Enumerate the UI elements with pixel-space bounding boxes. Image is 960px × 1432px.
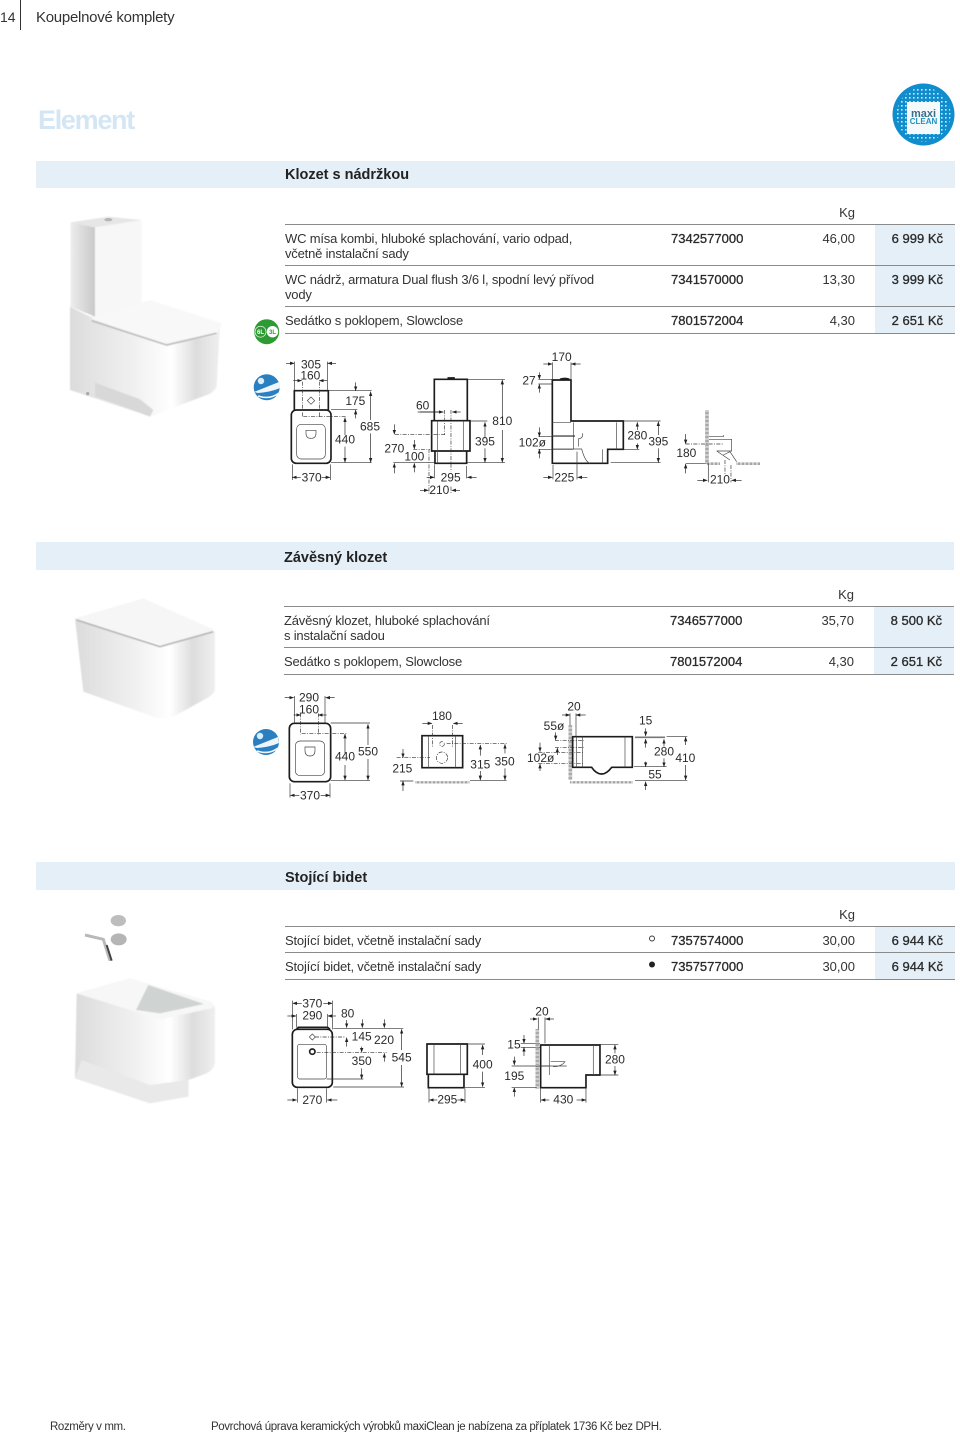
section heading band: Stojící bidet bbox=[285, 870, 367, 886]
product table: WC nádrž, armatura Dual flush 3/6 l, spodní levý přívod bbox=[285, 272, 594, 287]
technical drawing: bidet views: 80 bbox=[341, 1007, 355, 1021]
product table: Sedátko s poklopem, Slowclose bbox=[284, 654, 462, 669]
technical drawing: side view and installation: 395 bbox=[648, 435, 669, 449]
product table: 7346577000 bbox=[670, 613, 742, 628]
technical drawing: side view and installation: 280 bbox=[627, 428, 648, 442]
product table: 7801572004 bbox=[671, 313, 743, 328]
technical drawing: top view and front view bbox=[286, 357, 513, 497]
product table: 30,00 bbox=[822, 959, 855, 974]
icon: 6L/3L dual flush bbox=[254, 319, 279, 344]
page header: page number and chapter: Koupelnové komplety bbox=[36, 9, 175, 26]
technical drawing: bidet views bbox=[287, 996, 625, 1107]
technical drawing: top view and cistern view: 370 bbox=[300, 788, 320, 802]
title: Element: Element bbox=[38, 105, 135, 135]
technical drawing: bidet views: 220 bbox=[374, 1033, 394, 1047]
product table: Stojící bidet, včetně instalační sady bbox=[285, 933, 482, 948]
technical drawing: side view: 55 bbox=[648, 768, 662, 782]
technical drawing: side view: 55ø bbox=[544, 719, 565, 733]
section heading band bbox=[36, 862, 955, 890]
technical drawing: top view and cistern view bbox=[285, 691, 515, 802]
product table: 2 651 Kč bbox=[892, 313, 943, 328]
icon: maxiClean badge bbox=[892, 84, 954, 146]
icon: 6L/3L dual flush: 6L bbox=[257, 330, 264, 336]
product table: 7357574000 bbox=[671, 933, 743, 948]
technical drawing: bidet views: 370 bbox=[302, 996, 323, 1010]
product table: WC mísa kombi, hluboké splachování, vario odpad, bbox=[285, 231, 572, 246]
technical drawing: side view bbox=[527, 699, 696, 790]
product table: Závěsný klozet, hluboké splachování bbox=[284, 613, 490, 628]
technical drawing: side view and installation: 180 bbox=[676, 446, 697, 460]
product table: 7357577000 bbox=[671, 959, 743, 974]
icon: 6L/3L dual flush: 3L bbox=[269, 330, 276, 336]
section heading band bbox=[36, 161, 955, 188]
product table: včetně instalační sady bbox=[285, 246, 409, 261]
technical drawing: bidet views: 350 bbox=[352, 1054, 372, 1068]
panel: Klozet s nádržkou bbox=[36, 161, 955, 497]
product table: 3 999 Kč bbox=[892, 272, 943, 287]
product table: 7342577000 bbox=[671, 231, 743, 246]
technical drawing: side view and installation: 27 bbox=[522, 374, 536, 388]
product table: 13,30 bbox=[822, 272, 855, 287]
photo: close-coupled toilet bbox=[70, 217, 222, 417]
product table bbox=[285, 205, 955, 334]
product table: 30,00 bbox=[822, 933, 855, 948]
technical drawing: side view and installation: 225 bbox=[554, 470, 575, 484]
technical drawing: top view and cistern view: 315 bbox=[470, 757, 491, 771]
product table: 8 500 Kč bbox=[891, 613, 942, 628]
technical drawing: side view and installation: 210 bbox=[710, 473, 730, 487]
product table: 7341570000 bbox=[671, 272, 743, 287]
technical drawing: bidet views: 545 bbox=[392, 1050, 412, 1064]
technical drawing: top view and front view: 440 bbox=[335, 433, 355, 447]
technical drawing: bidet views: 400 bbox=[473, 1058, 493, 1072]
technical drawing: side view and installation: 170 bbox=[552, 350, 572, 364]
product table: 7801572004 bbox=[670, 654, 742, 669]
product table: 6 999 Kč bbox=[892, 231, 943, 246]
technical drawing: bidet views: 15 bbox=[507, 1037, 521, 1051]
product table: Kg bbox=[838, 587, 854, 602]
technical drawing: top view and front view: 370 bbox=[302, 470, 322, 484]
technical drawing: bidet views: 295 bbox=[437, 1093, 458, 1107]
technical drawing: top view and front view: 395 bbox=[475, 435, 495, 449]
product table: 6 944 Kč bbox=[892, 933, 943, 948]
product table: 46,00 bbox=[822, 231, 855, 246]
technical drawing: bidet views: 280 bbox=[605, 1052, 625, 1066]
technical drawing: top view and cistern view: 440 bbox=[335, 750, 355, 764]
technical drawing: top view and front view: 210 bbox=[429, 483, 450, 497]
product table: Kg bbox=[839, 907, 855, 922]
technical drawing: side view: 102ø bbox=[527, 751, 555, 765]
technical drawing: top view and cistern view: 215 bbox=[392, 762, 413, 776]
product table: vody bbox=[285, 287, 312, 302]
technical drawing: side view: 20 bbox=[567, 699, 581, 713]
product table bbox=[285, 907, 955, 980]
icon: maxiClean badge: CLEAN bbox=[910, 117, 937, 126]
page header: page number and chapter: 14 bbox=[0, 9, 16, 25]
technical drawing: bidet views: 270 bbox=[302, 1093, 323, 1107]
technical drawing: bidet views: 430 bbox=[553, 1093, 574, 1107]
technical drawing: top view and cistern view: 160 bbox=[299, 703, 319, 717]
technical drawing: top view and front view: 160 bbox=[300, 369, 321, 383]
technical drawing: bidet views: 195 bbox=[504, 1069, 525, 1083]
technical drawing: side view: 15 bbox=[639, 713, 653, 727]
technical drawing: side view: 280 bbox=[654, 745, 674, 759]
icon: maxiClean badge: maxi bbox=[911, 108, 936, 120]
panel: Závěsný klozet bbox=[36, 542, 954, 802]
panel: Stojící bidet bbox=[36, 862, 955, 1107]
photo: bidet and wall tap bbox=[75, 915, 215, 1103]
technical drawing: top view and cistern view: 290 bbox=[299, 691, 319, 705]
product table bbox=[284, 587, 954, 674]
product table: 6 944 Kč bbox=[892, 959, 943, 974]
product table: Stojící bidet, včetně instalační sady bbox=[285, 959, 482, 974]
photo: wall-hung toilet bbox=[75, 598, 215, 718]
product table: 4,30 bbox=[830, 313, 855, 328]
product table: s instalační sadou bbox=[284, 628, 385, 643]
technical drawing: top view and cistern view: 350 bbox=[495, 754, 515, 768]
product table: Sedátko s poklopem, Slowclose bbox=[285, 313, 463, 328]
technical drawing: top view and front view: 270 bbox=[384, 441, 405, 455]
section heading band bbox=[36, 542, 954, 570]
icon: deep flush bbox=[254, 374, 280, 400]
technical drawing: bidet views: 20 bbox=[535, 1004, 549, 1018]
technical drawing: top view and front view: 175 bbox=[345, 394, 366, 408]
technical drawing: top view and cistern view: 180 bbox=[432, 709, 452, 723]
icon: deep flush bbox=[253, 729, 279, 755]
technical drawing: top view and front view: 305 bbox=[301, 357, 321, 371]
page header: page number and chapter bbox=[0, 0, 175, 30]
technical drawing: bidet views: 290 bbox=[302, 1008, 323, 1022]
product table: Kg bbox=[839, 205, 855, 220]
product table: 35,70 bbox=[821, 613, 854, 628]
product table: 4,30 bbox=[829, 654, 854, 669]
technical drawing: side view and installation: 102ø bbox=[519, 436, 547, 450]
section heading band: Klozet s nádržkou bbox=[285, 167, 409, 183]
product table: 2 651 Kč bbox=[891, 654, 942, 669]
technical drawing: top view and front view: 685 bbox=[360, 420, 380, 434]
technical drawing: side view and installation bbox=[519, 350, 761, 487]
technical drawing: top view and front view: 100 bbox=[404, 449, 425, 463]
technical drawing: top view and front view: 810 bbox=[492, 414, 513, 428]
technical drawing: top view and front view: 60 bbox=[416, 399, 430, 413]
technical drawing: top view and cistern view: 550 bbox=[358, 745, 378, 759]
technical drawing: top view and front view: 295 bbox=[441, 470, 461, 484]
section heading band: Závěsný klozet bbox=[284, 550, 387, 566]
technical drawing: bidet views: 145 bbox=[352, 1030, 372, 1044]
technical drawing: side view: 410 bbox=[675, 751, 696, 765]
